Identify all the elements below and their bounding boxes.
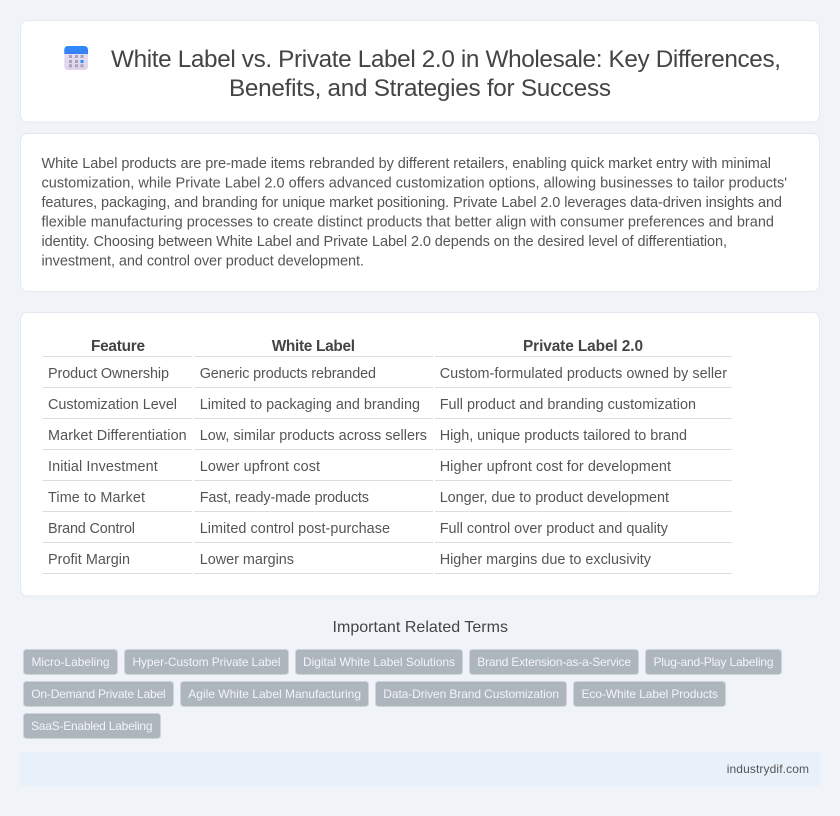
tag: Micro-Labeling: Micro-Labeling (32, 655, 110, 669)
table row: product ownership: Custom-formulated products owned by seller (440, 366, 727, 382)
table row: time to market: Longer, due to product development (440, 490, 669, 506)
table row: customization level: Limited to packaging and branding (200, 397, 420, 413)
tag: Hyper-Custom Private Label: Hyper-Custom Private Label (132, 655, 280, 669)
table row: market differentiation: Market Differentiation (48, 428, 187, 444)
tag: Brand Extension-as-a-Service: Brand Extension-as-a-Service (477, 655, 631, 669)
tag: Plug-and-Play Labeling (646, 650, 782, 674)
table row: brand control: Full control over product and quality (440, 521, 669, 537)
tag: Digital White Label Solutions (296, 650, 462, 674)
table row: brand control (48, 521, 669, 537)
table row: time to market: Fast, ready-made products (200, 490, 369, 506)
table row: product ownership: Generic products rebranded (200, 366, 376, 382)
table row: brand control: Brand Control (48, 521, 135, 537)
table row: profit margin: Profit Margin (48, 552, 130, 568)
table row: profit margin: Higher margins due to exclusivity (440, 552, 652, 568)
title: White Label vs. Private Label 2.0 in Wholesale: Key Differences, (111, 46, 781, 73)
tag: Eco-White Label Products (574, 682, 726, 706)
table row: initial investment: Higher upfront cost for development (440, 459, 671, 475)
tag: Plug-and-Play Labeling: Plug-and-Play Labeling (654, 655, 774, 669)
tag: Data-Driven Brand Customization: Data-Driven Brand Customization (383, 687, 559, 701)
heading: important related terms: Important Related Terms (332, 619, 508, 636)
text block: introduction paragraph (42, 156, 787, 270)
table row: initial investment: Initial Investment (48, 459, 158, 475)
tag: Hyper-Custom Private Label (124, 650, 288, 674)
tag: Data-Driven Brand Customization (376, 682, 566, 706)
table row: brand control: Limited control post-purchase (200, 521, 390, 537)
panel: comparison table (20, 312, 820, 596)
table row: customization level: Customization Level (48, 397, 177, 413)
table row: customization level: Full product and branding customization (440, 397, 696, 413)
table row: product ownership (48, 366, 727, 382)
tag: Eco-White Label Products: Eco-White Label Products (582, 687, 718, 701)
tags: related terms (24, 650, 782, 738)
footer: industrydif.com (727, 762, 809, 776)
text block: introduction paragraph: identity. Choosing between White Label and Private Label 2.0 depends on the desired level of differentiation, (42, 234, 727, 250)
tag: On-Demand Private Label: On-Demand Private Label (31, 687, 166, 701)
text block: introduction paragraph: customization, while Private Label 2.0 offers advanced customization options, allowing businesses to tailor products' (42, 176, 787, 192)
table row: market differentiation (48, 428, 687, 444)
table row: time to market: Time to Market (48, 490, 145, 506)
table row: market differentiation: Low, similar products across sellers (200, 428, 427, 444)
panel: introduction (20, 134, 820, 292)
table header: Feature (91, 338, 145, 355)
table row: time to market (48, 490, 669, 506)
title (111, 46, 781, 102)
table row: initial investment: Lower upfront cost (200, 459, 320, 475)
table row: product ownership: Product Ownership (48, 366, 169, 382)
footer (20, 752, 820, 786)
tag: Digital White Label Solutions: Digital White Label Solutions (303, 655, 455, 669)
table row: market differentiation: High, unique products tailored to brand (440, 428, 687, 444)
table header: Private Label 2.0 (523, 338, 643, 355)
title: Benefits, and Strategies for Success (229, 75, 611, 102)
table header: White Label (272, 338, 355, 355)
table header (91, 338, 643, 355)
tag: SaaS-Enabled Labeling (24, 714, 160, 738)
panel: title card (20, 20, 820, 122)
table row: profit margin: Lower margins (200, 552, 294, 568)
tag: Agile White Label Manufacturing (180, 682, 368, 706)
text block: introduction paragraph: flexible manufacturing processes to create distinct products that better align with consumer preferences and brand (42, 214, 774, 230)
tag: Micro-Labeling (24, 650, 118, 674)
tag: Agile White Label Manufacturing: Agile White Label Manufacturing (188, 687, 361, 701)
text block: introduction paragraph: features, packaging, and branding for unique market positioning. Private Label 2.0 leverages data-driven insights and (42, 195, 782, 211)
text block: introduction paragraph: White Label products are pre-made items rebranded by different retailers, enabling quick market entry with minimal (42, 156, 771, 172)
tag: Brand Extension-as-a-Service (470, 650, 638, 674)
table row: initial investment (48, 459, 671, 475)
tag: On-Demand Private Label (24, 682, 174, 706)
table row: profit margin (48, 552, 652, 568)
tag: SaaS-Enabled Labeling: SaaS-Enabled Labeling (31, 719, 152, 733)
table row: customization level (48, 397, 696, 413)
text block: introduction paragraph: investment, and control over product development. (42, 254, 364, 270)
icon: calendar (64, 46, 88, 70)
